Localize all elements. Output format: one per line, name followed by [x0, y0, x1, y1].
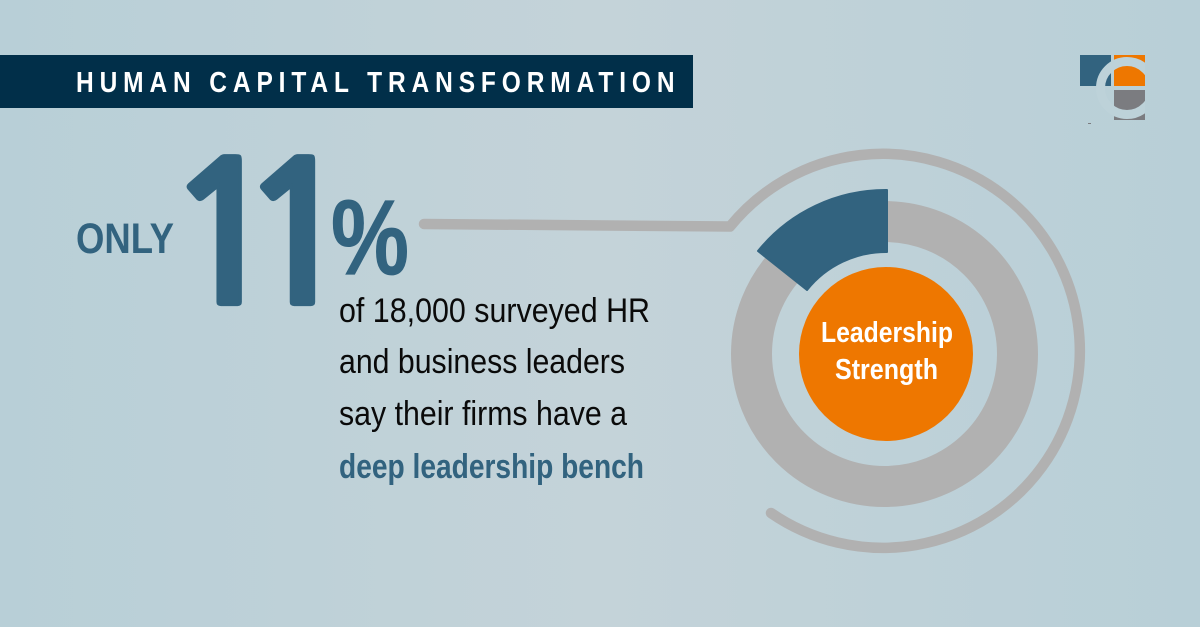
11 number: 1 [235, 140, 361, 334]
percent sign: % [331, 177, 409, 297]
title text: HUMAN CAPITAL TRANSFORMATION [76, 66, 675, 98]
headline statistic [76, 140, 409, 334]
title banner [0, 55, 693, 108]
description text: of 18,000 surveyed HR [339, 292, 650, 330]
highlighted phrase: deep leadership bench [339, 448, 644, 486]
logo icon [1080, 55, 1145, 124]
center label: Strength [835, 354, 938, 386]
description text: and business leaders [339, 343, 625, 381]
orange center circle [799, 267, 973, 441]
center label [821, 317, 953, 386]
description text: say their firms have a [339, 395, 627, 433]
grey ring [752, 222, 1018, 486]
center label: Leadership [821, 317, 953, 349]
only label: ONLY [76, 215, 174, 263]
description text [339, 292, 650, 486]
11 number [162, 140, 361, 334]
connector line and outer arc [424, 154, 1080, 548]
11 number: 1 [162, 140, 288, 334]
donut chart [752, 190, 1018, 486]
blue 11 percent segment [758, 190, 887, 290]
